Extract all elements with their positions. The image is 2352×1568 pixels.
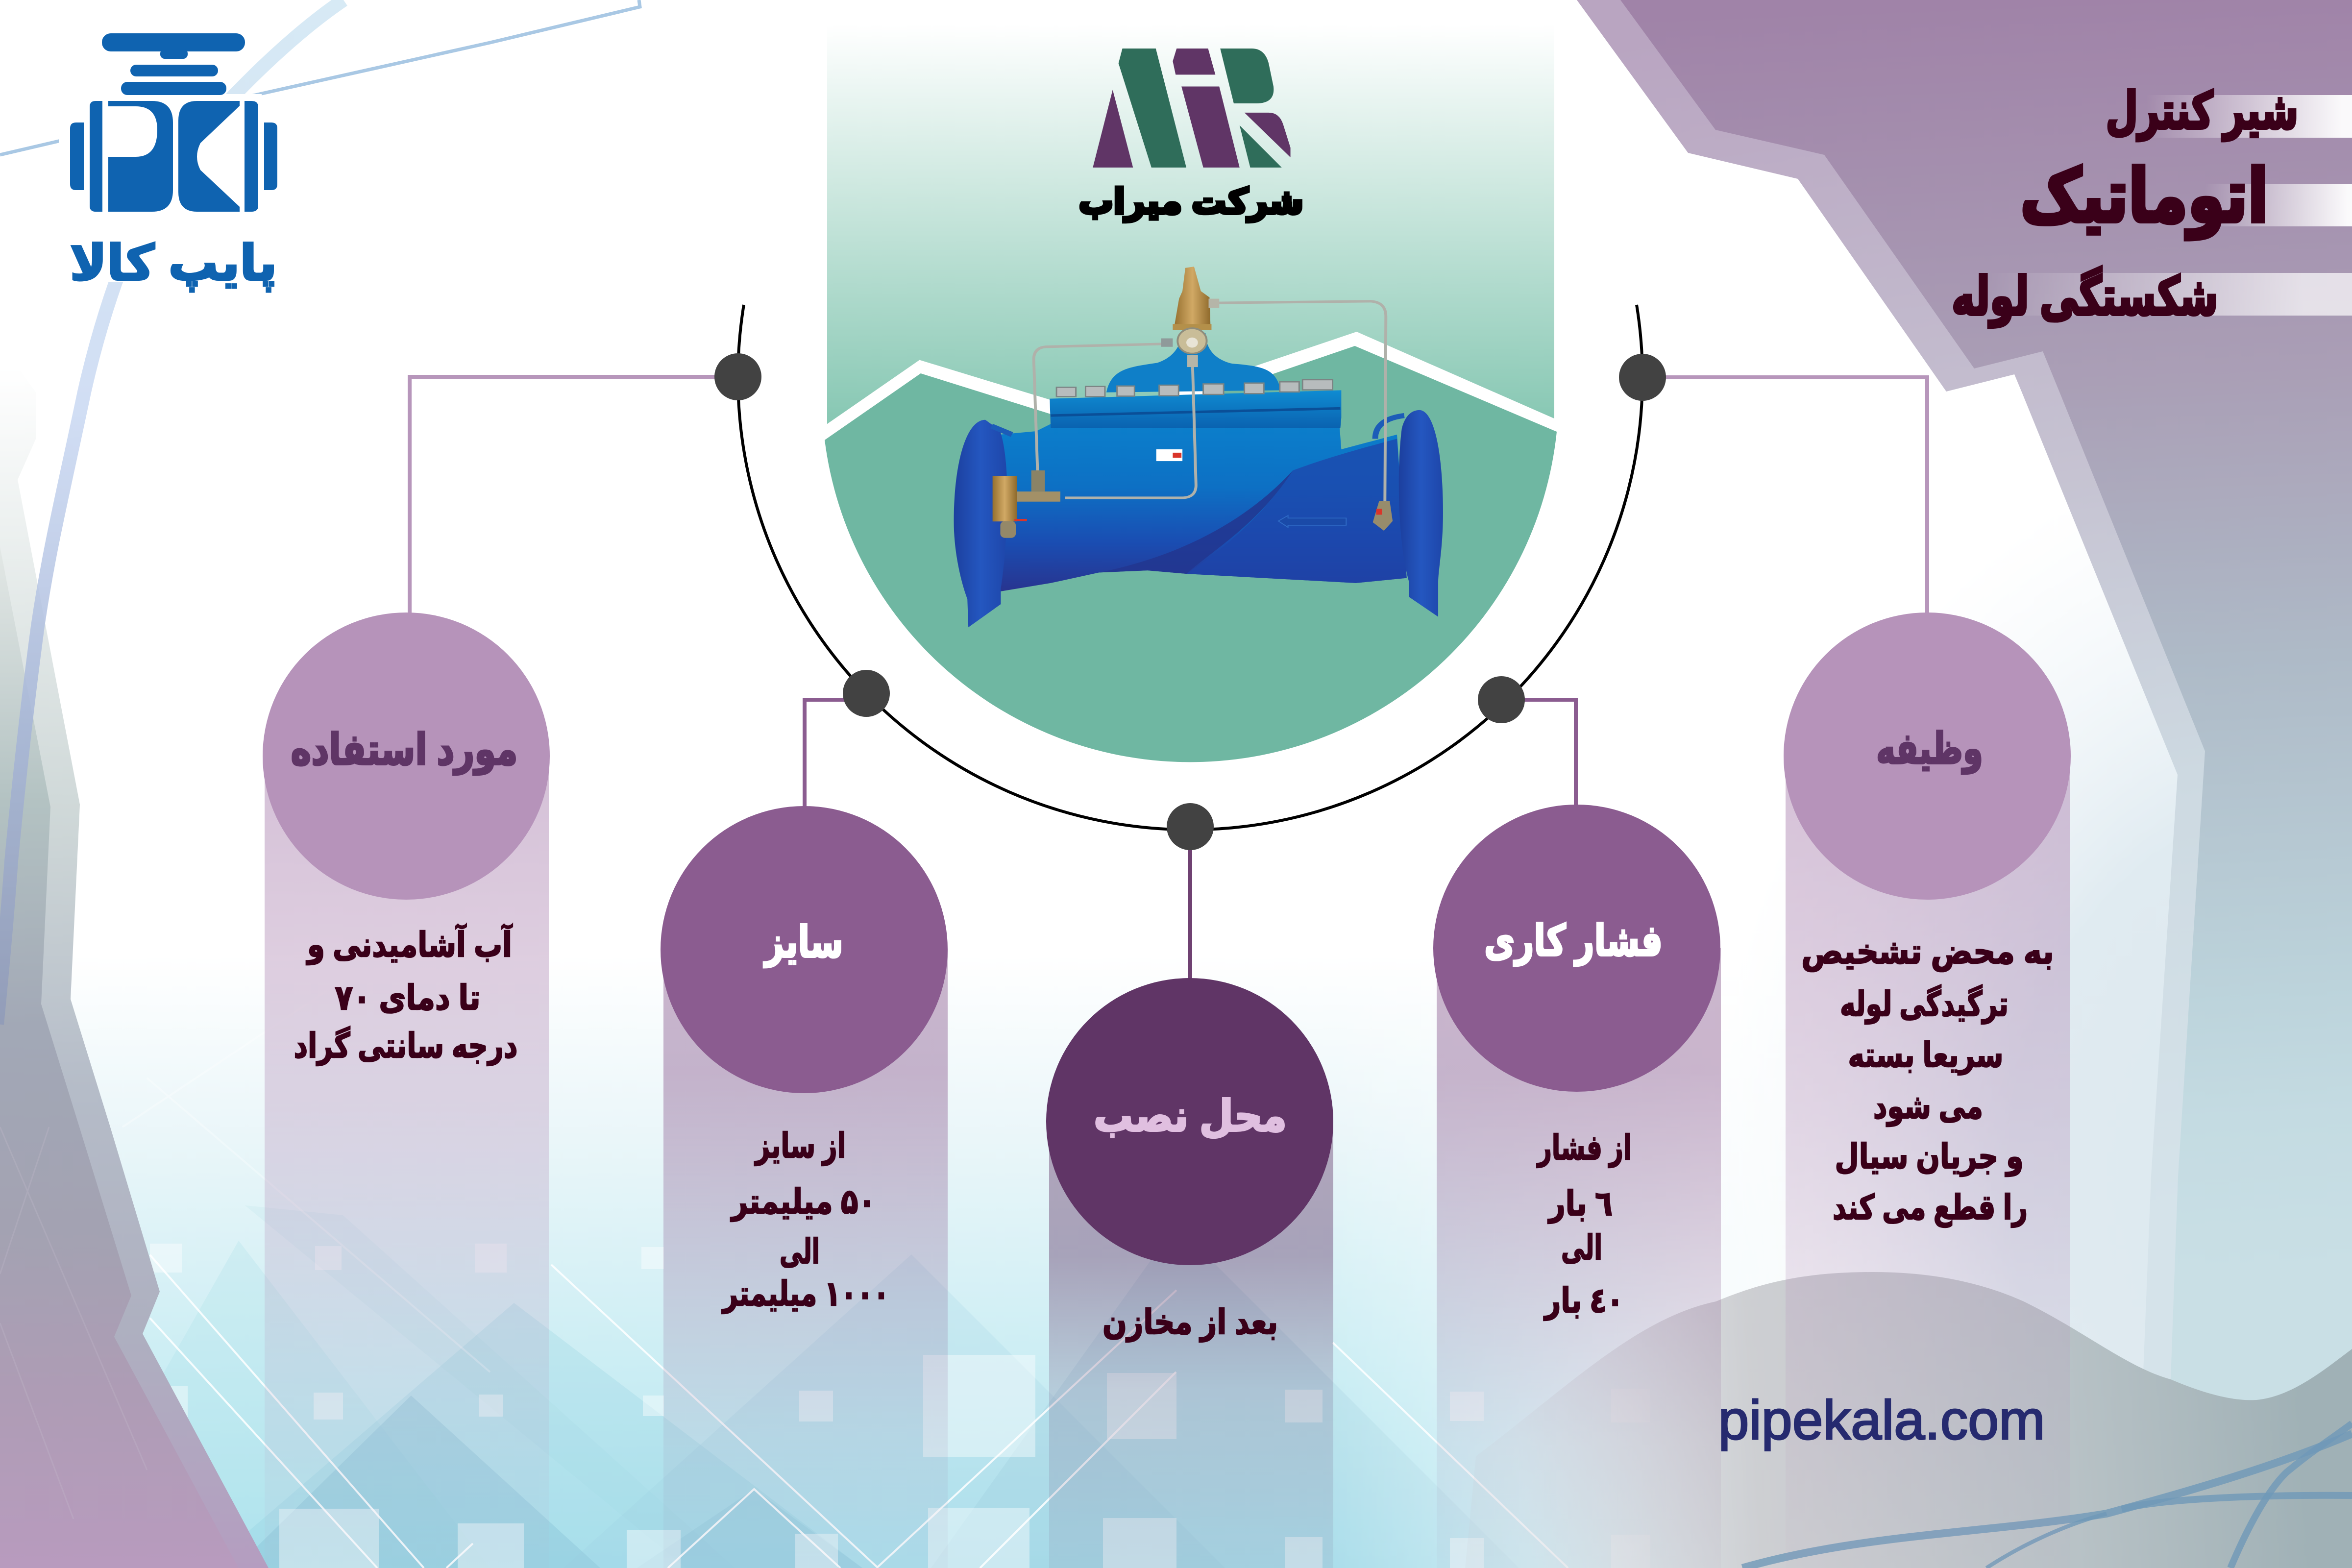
column: function — [1784, 612, 2071, 1568]
body text: size: ۱۰۰۰ میلیمتر — [722, 1274, 889, 1314]
body text: function: می شود — [1873, 1087, 1983, 1127]
valve left flange — [954, 420, 1007, 627]
connector: pressure — [1524, 700, 1576, 806]
body text: usage: تا دمای ۷۰ — [335, 979, 480, 1017]
body text: size — [722, 1127, 889, 1314]
background: left light shape — [0, 343, 269, 1568]
valve bonnet — [1050, 390, 1341, 428]
node: size — [843, 670, 890, 717]
title: line 3: شکستگی لوله — [1952, 266, 2218, 328]
valve body — [1000, 417, 1407, 591]
valve right flange — [1399, 410, 1443, 617]
valve image — [954, 267, 1443, 627]
body text: usage: درجه سانتی گراد — [294, 1026, 517, 1066]
column: size — [661, 806, 948, 1568]
title band: line 1 — [2146, 95, 2352, 138]
body text: usage: آب آشامیدنی و — [306, 924, 513, 965]
body text: pressure: از فشار — [1537, 1128, 1632, 1168]
right fitting — [1373, 501, 1393, 531]
icon: valve mark — [70, 33, 277, 212]
body text: size: ۵۰ میلیمتر — [731, 1182, 876, 1222]
logo wordmark: پایپ کالا — [70, 236, 277, 292]
heading: function: وظیفه — [1876, 724, 1983, 774]
background: left pale lines — [0, 1127, 147, 1519]
body text: function — [1801, 932, 2054, 1227]
arc connecting the nodes — [738, 305, 1642, 830]
logo background box — [59, 94, 262, 282]
center panel: gradient top and green base — [825, 24, 1557, 762]
heading: installation: محل نصب — [1094, 1092, 1287, 1140]
background: top right light purple shape — [1577, 0, 2352, 1421]
body text: function: به محض تشخیص — [1801, 932, 2054, 972]
website address: pipekala.com — [1718, 1389, 2045, 1451]
body text: function: سریعا بسته — [1848, 1036, 2003, 1075]
node: pressure — [1478, 676, 1525, 723]
column: usage — [263, 612, 550, 1568]
connector: size — [805, 700, 845, 808]
body text: size: از سایز — [754, 1127, 846, 1166]
body text: pressure — [1537, 1128, 1632, 1321]
background: top right dark purple shape — [1620, 0, 2352, 1446]
background: bottom right wave — [1465, 1272, 2352, 1568]
body text: pressure: ٤٠ بار — [1544, 1281, 1624, 1321]
valve lifting eyes — [992, 416, 1404, 439]
body text: function: ترگیدگی لوله — [1840, 984, 2009, 1024]
column: pressure — [1433, 805, 1721, 1568]
pilot brass — [1174, 267, 1210, 327]
title band: line 2 — [2205, 184, 2352, 226]
strainer fitting — [993, 476, 1017, 521]
body marking arrow — [1278, 515, 1346, 527]
valve tubing — [1034, 301, 1386, 502]
logo: PipeKala — [70, 33, 277, 292]
body text: size: الی — [780, 1232, 820, 1271]
background: blue curved lines — [1742, 1423, 2352, 1568]
heading: usage: مورد استفاده — [291, 725, 517, 775]
connector: installation — [1188, 827, 1192, 980]
background: blue arc — [0, 0, 343, 1024]
valve lower right shade — [1186, 439, 1407, 583]
connector: function — [1642, 377, 1927, 613]
body text: function: و جریان سیال — [1835, 1137, 2024, 1176]
connector: usage — [410, 377, 738, 613]
body text: usage — [294, 924, 517, 1066]
title band: line 3 — [1989, 273, 2352, 316]
body text: pressure: الی — [1561, 1228, 1602, 1267]
node: top right — [1619, 354, 1666, 401]
background: left dark shape — [0, 547, 239, 1568]
body text: installation: بعد از مخازن — [1102, 1303, 1278, 1342]
nameplate — [1156, 449, 1182, 461]
background: bottom geometric pattern — [0, 956, 1813, 1568]
valve diagonal swoosh — [1099, 470, 1293, 574]
background: thin blue line — [0, 0, 640, 155]
node: installation — [1167, 803, 1214, 850]
heading: size: سایز — [763, 918, 843, 967]
column: installation — [1046, 978, 1333, 1568]
company name: شرکت میراب — [1079, 183, 1303, 222]
title: line 2: اتوماتیک — [2020, 155, 2268, 240]
logo: MR company — [1079, 49, 1303, 222]
node: top left — [714, 353, 761, 400]
body text: function: را قطع می کند — [1833, 1188, 2028, 1227]
background: right side soft gradient — [1715, 441, 2352, 1568]
heading: pressure: فشار کاری — [1484, 916, 1663, 966]
body text: pressure: ٦ بار — [1547, 1184, 1613, 1224]
valve bolts — [1056, 380, 1333, 396]
